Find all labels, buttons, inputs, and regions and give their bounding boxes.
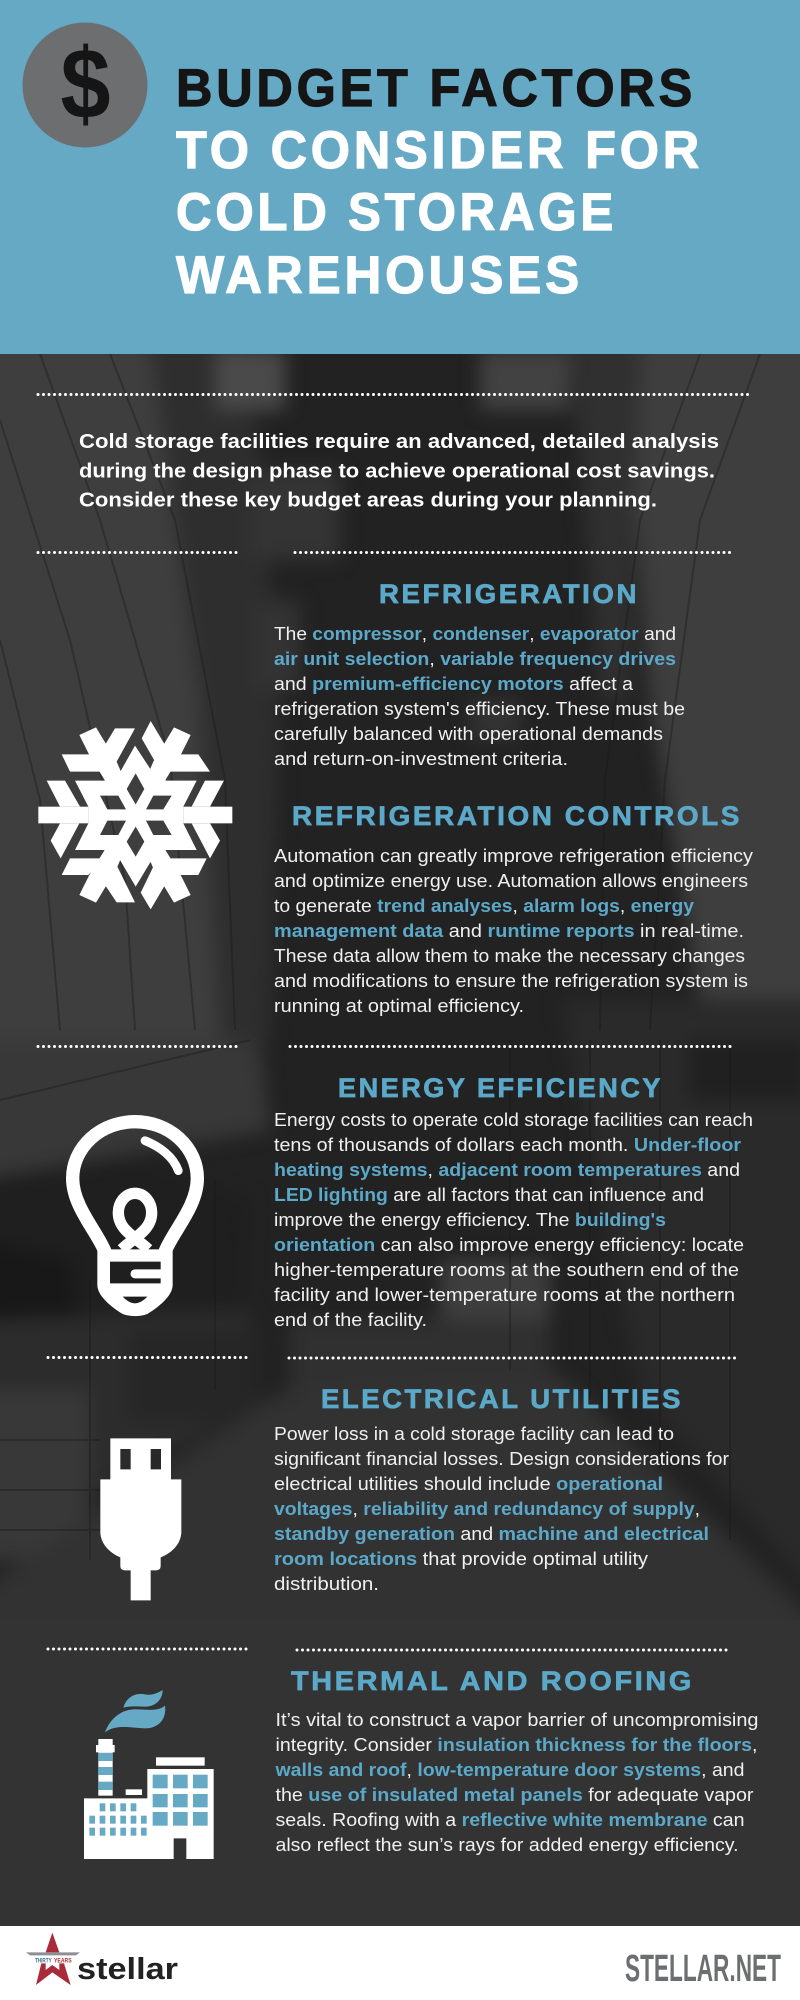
text: controls body: to generate trend analyses , alarm logs, energy [274, 895, 695, 916]
text: controls body: These data allow them to make the necessary changes [274, 945, 745, 966]
heading: electrical utilities: ELECTRICAL UTILITIES [321, 1384, 683, 1414]
text: electrical body [274, 1423, 729, 1594]
text: energy body: facility and lower-temperature rooms at the northern [274, 1284, 735, 1305]
intro text [79, 430, 719, 512]
intro text: Consider these key budget areas during your planning. [79, 488, 657, 512]
icon: dollar coin: $ [60, 28, 110, 140]
panel: refrigeration controls [274, 801, 754, 1016]
text: electrical body: room locations that provide optimal utility [274, 1548, 649, 1569]
text: energy body: end of the facility. [274, 1309, 427, 1330]
text: electrical body: Power loss in a cold storage facility can lead to [274, 1423, 674, 1444]
text: thermal body: integrity. Consider insulation thickness for the floors , [276, 1734, 758, 1755]
text: controls body: Automation can greatly improve refrigeration efficiency [274, 845, 754, 866]
shelf perspective lines [0, 354, 760, 1560]
dark warehouse background photo [0, 340, 800, 1940]
logo: stellar star [26, 1933, 80, 1985]
text: thermal body [274, 1709, 758, 1855]
title: WAREHOUSES [176, 246, 583, 305]
logo: stellar wordmark: stellar [77, 1951, 178, 1986]
text: thermal body: the use of insulated metal panels for adequate vapor [276, 1784, 754, 1805]
intro text: during the design phase to achieve operational cost savings. [79, 460, 715, 482]
text: energy body: Energy costs to operate cold storage facilities can reach [274, 1109, 753, 1130]
text: controls body: running at optimal efficiency. [274, 995, 524, 1016]
heading: energy efficiency: ENERGY EFFICIENCY [338, 1073, 663, 1103]
text: energy body [274, 1109, 753, 1330]
header band [0, 0, 800, 354]
text: electrical body: distribution. [274, 1573, 379, 1594]
panel: energy efficiency [274, 1073, 753, 1330]
text: electrical body: significant financial losses. Design considerations for [274, 1448, 729, 1469]
text: energy body: higher-temperature rooms at the southern end of the [274, 1259, 739, 1280]
title [176, 59, 703, 305]
text: controls body [274, 845, 754, 1016]
panel: electrical utilities [274, 1384, 729, 1594]
text: energy body: heating systems , adjacent room temperatures and [274, 1159, 740, 1180]
heading: refrigeration controls: REFRIGERATION CONTROLS [292, 801, 742, 831]
floor [0, 1375, 800, 1940]
text: energy body: orientation can also improve energy efficiency: locate [274, 1234, 744, 1255]
panel: thermal and roofing [274, 1666, 758, 1855]
icon: power plug [100, 1438, 181, 1600]
text: controls body: management data and runtime reports in real-time. [274, 920, 744, 941]
title: TO CONSIDER FOR [176, 121, 703, 180]
heading: thermal and roofing: THERMAL AND ROOFING [291, 1666, 694, 1696]
text: refrigeration body: and premium-efficiency motors affect a [274, 673, 634, 694]
text: refrigeration body [274, 623, 685, 769]
icon: light bulb [73, 1122, 197, 1316]
logo: stellar star: THIRTY [35, 1957, 52, 1964]
text: energy body: LED lighting are all factors that can influence and [274, 1184, 704, 1205]
text: electrical body: voltages, reliability and redundancy of supply , [274, 1498, 700, 1519]
text: refrigeration body: refrigeration system's efficiency. These must be [274, 698, 685, 719]
logo: stellar star: YEARS [54, 1957, 72, 1964]
panel: refrigeration [274, 579, 685, 769]
text: refrigeration body: The compressor, condenser, evaporator and [274, 623, 676, 644]
title: COLD STORAGE [176, 183, 617, 242]
text: energy body: tens of thousands of dollars each month. Under-floor [274, 1134, 741, 1155]
text: energy body: improve the energy efficiency. The building's [274, 1209, 666, 1230]
text: thermal body: walls and roof , low-temperature door systems , and [274, 1759, 744, 1780]
text: refrigeration body: carefully balanced with operational demands [274, 723, 663, 744]
text: refrigeration body: and return-on-investment criteria. [274, 748, 568, 769]
title: BUDGET FACTORS [176, 59, 696, 118]
icon: dollar coin [22, 22, 148, 148]
text: thermal body: It’s vital to construct a vapor barrier of uncompromising [276, 1709, 758, 1730]
text: thermal body: seals. Roofing with a reflective white membrane can [276, 1809, 744, 1830]
text: electrical body: standby generation and machine and electrical [274, 1523, 709, 1544]
text: refrigeration body: air unit selection , variable frequency drives [274, 648, 676, 669]
heading: refrigeration: REFRIGERATION [379, 579, 639, 609]
text: controls body: and optimize energy use. Automation allows engineers [274, 870, 748, 891]
icon: snowflake [38, 721, 232, 909]
text: electrical body: electrical utilities should include operational [274, 1473, 663, 1494]
text: thermal body: also reflect the sun’s rays for added energy efficiency. [276, 1834, 738, 1855]
text: controls body: and modifications to ensure the refrigeration system is [274, 970, 748, 991]
icon: factory [84, 1690, 214, 1859]
intro text: Cold storage facilities require an advanced, detailed analysis [79, 430, 719, 453]
footer band [0, 1926, 800, 2000]
